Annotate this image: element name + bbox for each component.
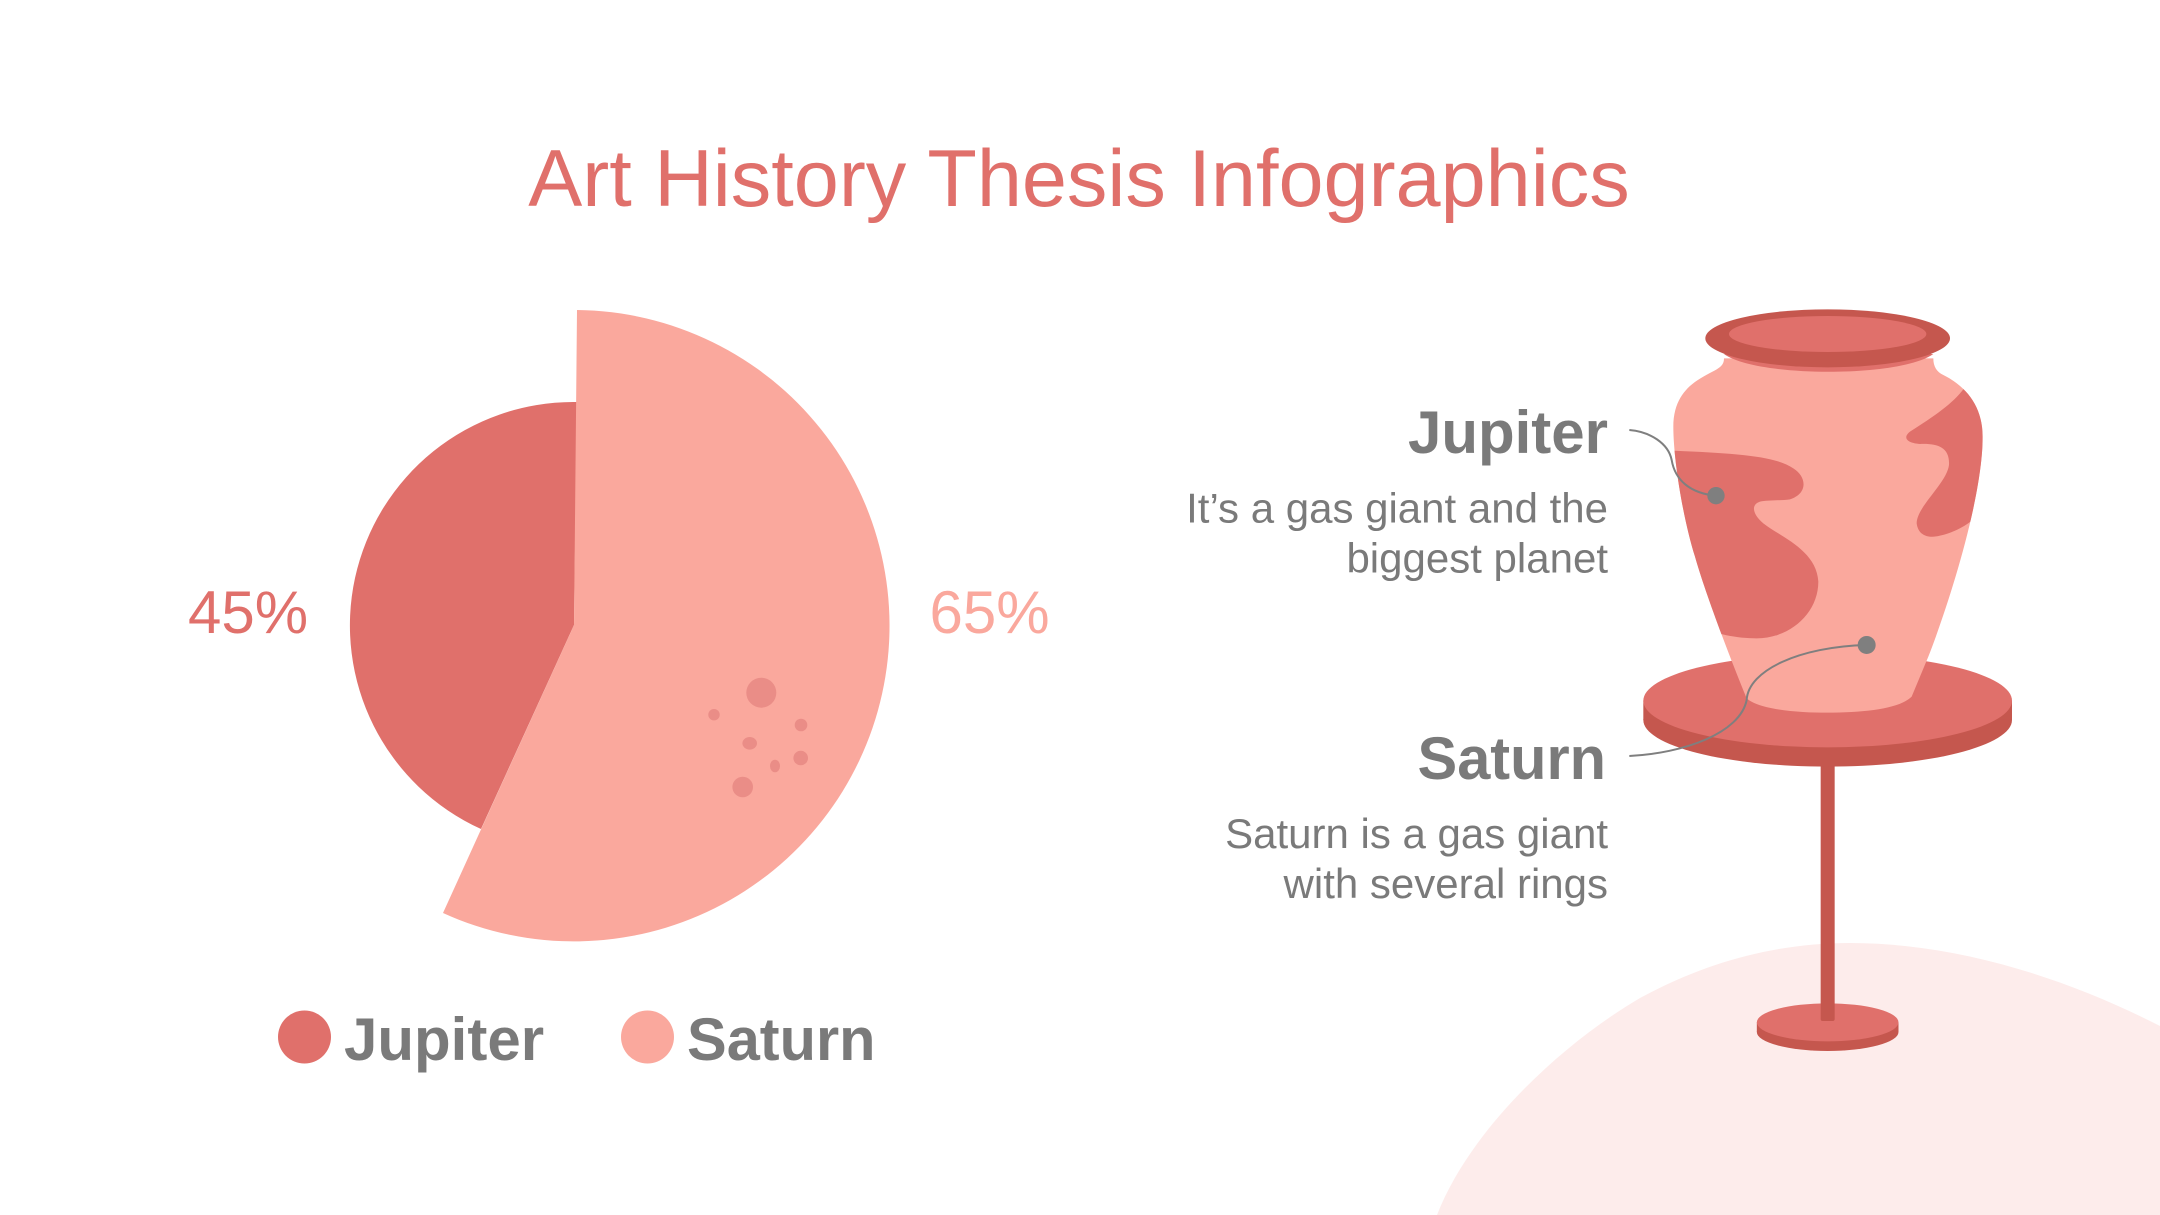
- percentage: Saturn: 65%: [930, 579, 1050, 646]
- connector: Jupiter: [1629, 430, 1725, 504]
- callout heading: Saturn: Saturn: [1418, 725, 1606, 792]
- callout text: Jupiter: biggest planet: [1346, 534, 1608, 582]
- callout text: Jupiter: It’s a gas giant and the: [1186, 484, 1608, 532]
- legend swatch: Saturn: [621, 1010, 674, 1064]
- legend label: Saturn: Saturn: [687, 1006, 876, 1073]
- legend: [278, 1006, 876, 1073]
- callout: Saturn: [1225, 725, 1608, 907]
- pie chart: [350, 310, 890, 941]
- callout: Jupiter: [1186, 399, 1608, 582]
- table pole: [1821, 760, 1835, 1021]
- title: Art History Thesis Infographics: [528, 134, 1630, 224]
- legend swatch: Jupiter: [278, 1010, 331, 1064]
- vase opening: [1729, 316, 1926, 352]
- callout heading: Jupiter: Jupiter: [1408, 399, 1608, 466]
- table base: [1757, 1003, 1898, 1051]
- vase neck shadow: [1724, 354, 1933, 372]
- callout text: Saturn: Saturn is a gas giant: [1225, 810, 1608, 857]
- vase rim: [1705, 309, 1950, 367]
- speckles on Saturn slice: [708, 678, 808, 797]
- table top: [1643, 654, 2012, 767]
- vase body: [1673, 358, 1983, 713]
- pie slice: Saturn: [443, 310, 890, 941]
- vase pattern: right patch: [1906, 389, 1983, 537]
- legend label: Jupiter: Jupiter: [344, 1006, 544, 1073]
- pie slice: Jupiter: [350, 402, 577, 829]
- connector: Saturn: [1629, 636, 1876, 756]
- vase pattern: left patch: [1674, 450, 1818, 638]
- percentage: Jupiter: 45%: [188, 579, 308, 646]
- vase on table illustration: [1629, 309, 2012, 1051]
- background blob: [1437, 943, 2160, 1215]
- callout text: Saturn: with several rings: [1283, 860, 1608, 907]
